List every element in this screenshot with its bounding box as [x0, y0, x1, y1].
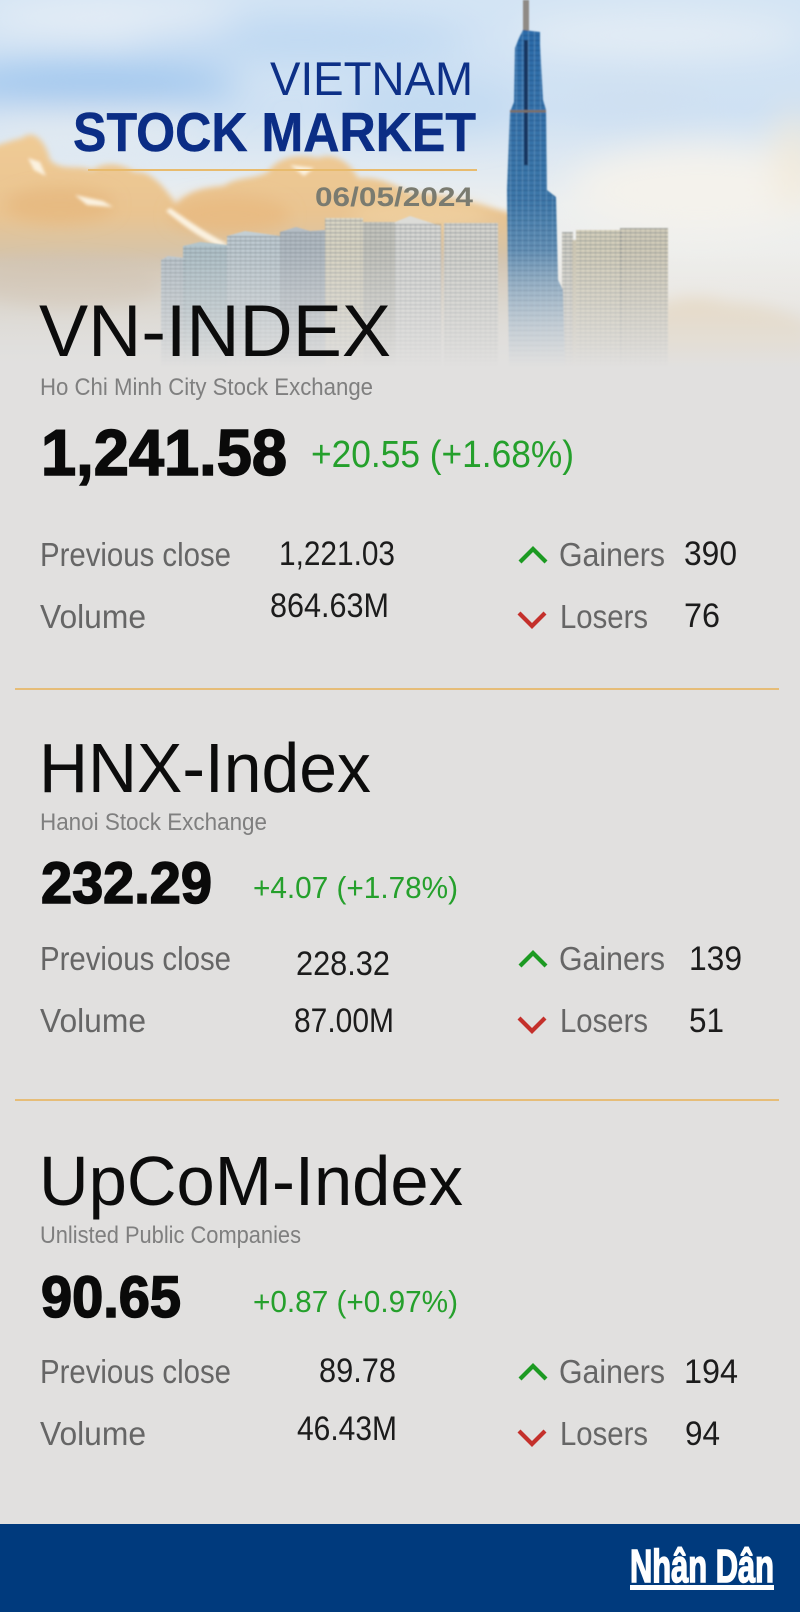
gainers label: Gainers — [559, 536, 665, 573]
losers value: 51 — [689, 1002, 724, 1040]
index change: +0.87 (+0.97%) — [253, 1284, 458, 1319]
index change: +20.55 (+1.68%) — [311, 434, 574, 476]
index name: VN-INDEX — [39, 291, 391, 372]
index value: 232.29 — [41, 851, 212, 916]
losers label: Losers — [560, 598, 648, 635]
bottom mist — [0, 250, 800, 400]
panel: HNX-Index — [39, 729, 742, 1040]
index change: +4.07 (+1.78%) — [253, 870, 458, 905]
previous close label: Previous close — [40, 940, 231, 977]
gainers value: 194 — [684, 1353, 738, 1391]
previous close value: 1,221.03 — [279, 535, 395, 573]
title rule — [88, 169, 477, 171]
losers value: 94 — [685, 1415, 720, 1453]
volume label: Volume — [40, 598, 146, 635]
orange cloud bank — [0, 135, 530, 372]
landmark 81 tower — [507, 0, 565, 370]
panel: UpCoM-Index — [39, 1142, 738, 1453]
previous close label: Previous close — [40, 536, 231, 573]
losers value: 76 — [684, 597, 720, 635]
icon: gainers up chevron — [520, 1366, 546, 1379]
title line: Stock Market: STOCK MARKET — [73, 101, 476, 163]
index value: 1,241.58 — [41, 416, 287, 489]
volume label: Volume — [40, 1415, 146, 1452]
title block — [73, 52, 477, 212]
gainers label: Gainers — [559, 1353, 665, 1390]
previous close value: 89.78 — [319, 1352, 396, 1390]
losers label: Losers — [560, 1002, 648, 1039]
icon: gainers up chevron — [520, 549, 546, 562]
footer band — [0, 1524, 800, 1612]
residential towers — [161, 0, 668, 370]
volume value: 46.43M — [297, 1410, 397, 1448]
exchange name: Unlisted Public Companies — [40, 1222, 301, 1249]
index name: UpCoM-Index — [39, 1142, 463, 1220]
previous close value: 228.32 — [296, 945, 390, 983]
header photo: sky, clouds and skyline — [0, 0, 800, 400]
gainers value: 139 — [689, 940, 742, 978]
index name: HNX-Index — [39, 729, 371, 807]
cloud highlights — [28, 158, 314, 247]
title line: Vietnam: VIETNAM — [270, 52, 473, 105]
gainers label: Gainers — [559, 940, 665, 977]
exchange name: Ho Chi Minh City Stock Exchange — [40, 374, 373, 401]
volume value: 864.63M — [270, 587, 389, 625]
icon: gainers up chevron — [520, 953, 546, 966]
losers label: Losers — [560, 1415, 648, 1452]
index value: 90.65 — [41, 1265, 181, 1330]
volume label: Volume — [40, 1002, 146, 1039]
previous close label: Previous close — [40, 1353, 231, 1390]
volume value: 87.00M — [294, 1002, 394, 1040]
icon: losers down chevron — [519, 613, 545, 626]
right-hand distant cloud — [640, 298, 800, 372]
exchange name: Hanoi Stock Exchange — [40, 809, 267, 836]
cloud shading — [0, 187, 490, 309]
gainers value: 390 — [684, 535, 737, 573]
icon: losers down chevron — [519, 1018, 545, 1031]
date: 06/05/2024 — [315, 182, 473, 212]
panel: VN-Index — [39, 291, 737, 635]
icon: losers down chevron — [519, 1431, 545, 1444]
